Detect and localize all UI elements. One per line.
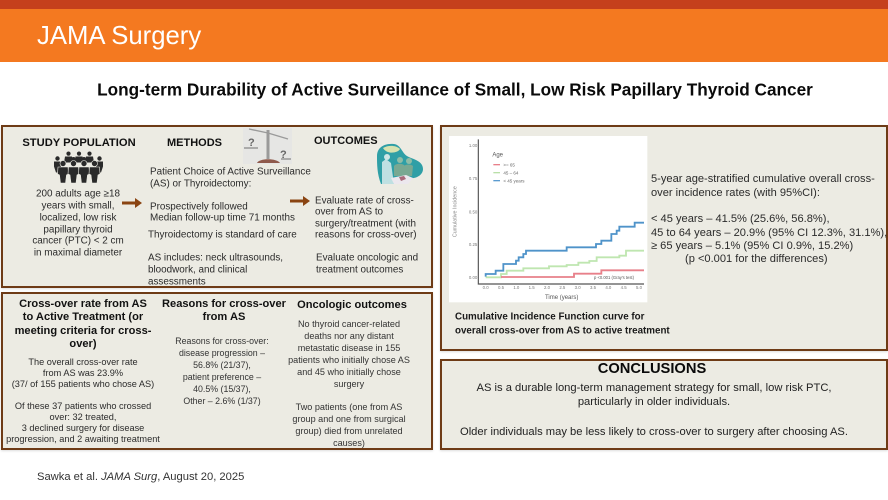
citation: Sawka et al. JAMA Surg, August 20, 2025 bbox=[37, 471, 244, 483]
heading: cross-over rate: to Active Treatment (or bbox=[23, 311, 143, 323]
chart: cumulative incidence function curve: 0.50 bbox=[469, 209, 478, 214]
text: age-stratified incidence rates bbox=[651, 173, 887, 265]
text: outcomes description: over from AS to bbox=[315, 207, 383, 218]
text: reasons details: Other – 2.6% (1/37) bbox=[183, 396, 261, 406]
text: age-stratified incidence rates: (p <0.001 for the differences) bbox=[685, 253, 828, 265]
text: outcomes description: surgery/treatment (with bbox=[315, 218, 416, 229]
text: cross-over rate details: progression, and 2 awaiting treatment bbox=[6, 434, 160, 444]
text: study population description: papillary thyroid bbox=[43, 224, 113, 235]
text: conclusions: AS is a durable long-term management strategy for small, low risk PTC, bbox=[476, 382, 832, 394]
chart caption: Cumulative Incidence Function curve for bbox=[455, 312, 644, 323]
chart: cumulative incidence function curve: 0.75 bbox=[469, 176, 478, 181]
text: methods description: Thyroidectomy is standard of care bbox=[148, 230, 297, 241]
text: oncologic outcomes details: surgery bbox=[334, 379, 364, 389]
text: oncologic outcomes details: metastatic disease in 155 bbox=[298, 343, 400, 353]
chart: cumulative incidence function curve: Time (years) bbox=[545, 295, 578, 301]
text: methods description: Median follow-up time 71 months bbox=[150, 213, 295, 224]
heading: conclusions: CONCLUSIONS bbox=[598, 361, 706, 377]
panel: study design bbox=[1, 125, 433, 288]
chart: cumulative incidence function curve: 0.0 bbox=[483, 285, 489, 290]
text: conclusions: Older individuals may be less likely to cross-over to surgery after choosing AS. bbox=[460, 426, 848, 438]
chart: cumulative incidence function curve: 1.00 bbox=[469, 143, 478, 148]
chart: cumulative incidence function curve: 3.0 bbox=[575, 285, 581, 290]
text: reasons details: 40.5% (15/37), bbox=[193, 384, 251, 394]
text: cross-over rate details: (37/ of 155 patients who chose AS) bbox=[12, 379, 154, 389]
text: outcomes description: Evaluate oncologic and bbox=[316, 253, 418, 264]
text: study population description: years with small, bbox=[42, 201, 114, 212]
text: age-stratified incidence rates: 5-year age-stratified cumulative overall cross- bbox=[651, 173, 875, 185]
chart: cumulative incidence function curve: 0.00 bbox=[469, 275, 478, 280]
heading: cross-over rate: Cross-over rate from AS bbox=[19, 297, 147, 309]
heading: study population: STUDY POPULATION bbox=[22, 137, 136, 149]
text: cross-over rate details: Of these 37 patients who crossed bbox=[15, 401, 151, 411]
chart: cumulative incidence function curve: p <0.001 (Gray's test) bbox=[594, 275, 635, 280]
text: age-stratified incidence rates: < 45 years – 41.5% (25.6%, 56.8%), bbox=[651, 213, 830, 225]
icon: balance scale: ? bbox=[280, 149, 287, 161]
text: oncologic outcomes details: Two patients (one from AS bbox=[296, 402, 402, 412]
text: study population description: 200 adults age ≥18 bbox=[36, 189, 120, 200]
text: reasons details: disease progression – bbox=[179, 348, 265, 358]
chart: cumulative incidence function curve: 0.5 bbox=[498, 285, 505, 290]
text: age-stratified incidence rates: ≥ 65 years – 5.1% (95% CI 0.9%, 15.2%) bbox=[651, 240, 853, 252]
icon: balance scale bbox=[244, 128, 291, 163]
text: cross-over rate details: 3 declined surgery for disease bbox=[22, 423, 144, 433]
chart: cumulative incidence function curve: 4.5 bbox=[621, 285, 627, 290]
chart: cumulative incidence function curve: Age bbox=[492, 153, 504, 159]
text: conclusions: particularly in older individuals. bbox=[578, 396, 730, 408]
text: outcomes description: Evaluate rate of cross- bbox=[315, 196, 414, 207]
text: cross-over rate details: The overall cross-over rate bbox=[28, 357, 138, 367]
icon: balance scale: ? bbox=[248, 137, 255, 149]
heading: reasons for cross-over: from AS bbox=[203, 311, 245, 323]
chart caption: overall cross-over from AS to active treatment bbox=[455, 325, 670, 336]
text: oncologic outcomes details bbox=[288, 319, 410, 448]
text: oncologic outcomes details: No thyroid cancer-related bbox=[298, 319, 400, 329]
text: reasons details: Reasons for cross-over: bbox=[175, 336, 269, 346]
chart: cumulative incidence function curve: 0.25 bbox=[469, 242, 478, 247]
arrow: methods to outcomes bbox=[290, 196, 310, 206]
chart: cumulative incidence function curve: >= 65 bbox=[503, 162, 515, 167]
chart: cumulative incidence function curve: 4.0 bbox=[605, 285, 612, 290]
text: outcomes description: treatment outcomes bbox=[316, 265, 403, 276]
panel: conclusions bbox=[440, 359, 888, 450]
text: outcomes description: reasons for cross-over) bbox=[315, 230, 417, 241]
text: study population description: localized, low risk bbox=[40, 213, 116, 224]
heading: cross-over rate: over) bbox=[69, 338, 97, 350]
text: reasons details: patient preference – bbox=[183, 372, 261, 382]
chart caption bbox=[455, 312, 670, 336]
text: methods description: Patient Choice of Active Surveillance bbox=[150, 166, 311, 177]
panel: results bbox=[1, 292, 433, 450]
heading: reasons for cross-over: Reasons for cross-over bbox=[162, 297, 286, 309]
header band: JAMA Surgery bbox=[37, 22, 201, 50]
text: oncologic outcomes details: group and one from surgical bbox=[292, 414, 406, 424]
text: study population description: in maximal diameter bbox=[34, 248, 122, 259]
text: oncologic outcomes details: causes) bbox=[333, 438, 365, 448]
text: cross-over rate details: over: 32 treated, bbox=[50, 412, 116, 422]
text: oncologic outcomes details: deaths nor any distant bbox=[304, 331, 394, 341]
chart: cumulative incidence function curve bbox=[449, 136, 648, 302]
heading: outcomes: OUTCOMES bbox=[314, 135, 378, 147]
heading: oncologic outcomes: Oncologic outcomes bbox=[297, 299, 407, 311]
heading: cross-over rate: meeting criteria for cross- bbox=[15, 324, 151, 336]
heading: methods: METHODS bbox=[167, 137, 222, 149]
text: age-stratified incidence rates: over incidence rates (with 95%CI): bbox=[651, 187, 820, 199]
text: oncologic outcomes details: patients who initially chose AS bbox=[288, 355, 410, 365]
text: methods description: bloodwork, and clinical bbox=[148, 265, 247, 276]
text: oncologic outcomes details: group) died from unrelated bbox=[295, 426, 403, 436]
text: methods description bbox=[148, 166, 311, 288]
text: age-stratified incidence rates: 45 to 64 years – 20.9% (95% CI 12.3%, 31.1%), bbox=[651, 227, 887, 239]
text: conclusions bbox=[460, 382, 848, 438]
text: study population description bbox=[32, 189, 124, 259]
icon: crowd of people bbox=[54, 152, 103, 183]
chart: cumulative incidence function curve: < 45 years bbox=[503, 178, 525, 183]
text: oncologic outcomes details: and 45 who initially chose bbox=[297, 367, 401, 377]
header band bbox=[0, 0, 888, 62]
text: reasons details bbox=[175, 336, 269, 406]
chart: cumulative incidence function curve: 1.5 bbox=[529, 285, 535, 290]
chart: cumulative incidence function curve: 5.0 bbox=[636, 285, 643, 290]
text: study population description: cancer (PTC) < 2 cm bbox=[32, 236, 124, 247]
icon: operating room bbox=[377, 144, 423, 184]
text: cross-over rate details bbox=[6, 357, 160, 444]
chart: cumulative incidence function curve: 2.0 bbox=[544, 285, 551, 290]
chart: cumulative incidence function curve: 45 – 64 bbox=[503, 170, 519, 175]
text: cross-over rate details: from AS was 23.9% bbox=[43, 368, 123, 378]
chart: cumulative incidence function curve: 3.5 bbox=[590, 285, 597, 290]
chart: cumulative incidence function curve: 1.0 bbox=[513, 285, 520, 290]
text: outcomes description bbox=[315, 196, 418, 276]
text: methods description: assessments bbox=[148, 277, 206, 288]
panel: cumulative incidence bbox=[440, 125, 888, 351]
title: Long-term Durability of Active Surveillance of Small, Low Risk Papillary Thyroid Cancer bbox=[97, 80, 813, 100]
text: methods description: (AS) or Thyroidectomy: bbox=[150, 179, 251, 190]
arrow: population to methods bbox=[122, 198, 142, 208]
text: reasons details: 56.8% (21/37), bbox=[193, 360, 251, 370]
heading: cross-over rate bbox=[15, 297, 151, 350]
text: methods description: AS includes: neck ultrasounds, bbox=[148, 253, 283, 264]
chart: cumulative incidence function curve: Cumulative Incidence bbox=[452, 186, 458, 237]
heading: reasons for cross-over bbox=[162, 297, 286, 323]
chart: cumulative incidence function curve: 2.5 bbox=[559, 285, 566, 290]
text: methods description: Prospectively followed bbox=[150, 201, 248, 212]
